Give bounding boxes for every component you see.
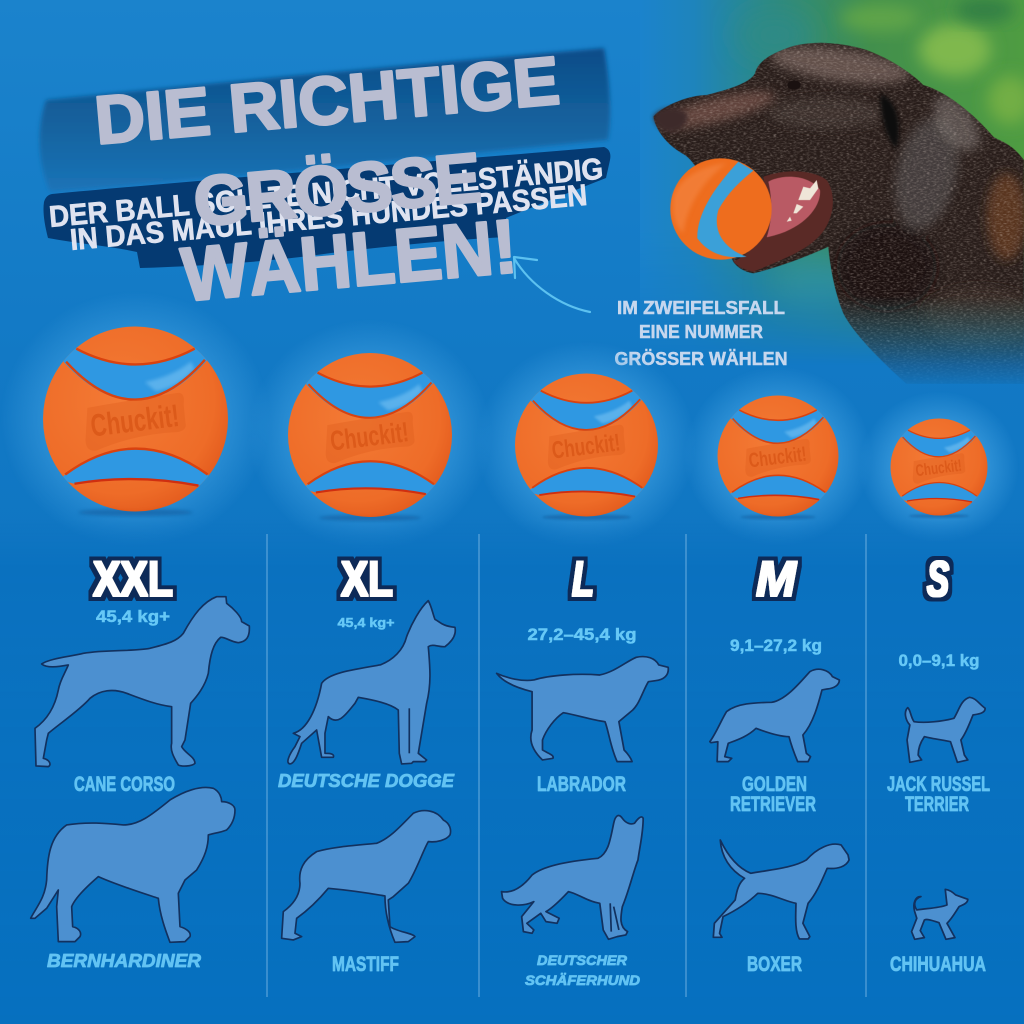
label golden retriever: RETRIEVER	[730, 793, 816, 816]
label deutscher schaeferhund: SCHÄFERHUND	[525, 972, 640, 988]
photo background: blurred meadow	[667, 0, 1024, 356]
main title: DIE RICHTIGE	[92, 43, 563, 159]
label jack russel terrier	[887, 773, 990, 816]
ball M	[718, 396, 838, 523]
weight S: 0,0–9,1 kg	[898, 652, 980, 670]
callout text: EINE NUMMER	[639, 322, 763, 342]
dog body and head	[653, 43, 1024, 384]
heading L: L	[572, 551, 594, 607]
title brush stroke, translucent dark	[40, 48, 610, 192]
label boxer: BOXER	[747, 953, 802, 976]
dog: bernhardiner	[31, 787, 235, 942]
subtitle text: IN DAS MAUL IHRES HUNDES PASSEN	[69, 179, 589, 257]
fur shading	[640, 33, 1024, 384]
dog: chihuahua	[912, 889, 968, 939]
label deutscher schaeferhund: DEUTSCHER	[537, 952, 628, 968]
subtitle brush stroke, navy	[44, 147, 610, 268]
dog: deutscher schaeferhund	[502, 815, 643, 939]
main title: WÄHLEN!	[178, 204, 520, 318]
open mouth	[733, 171, 833, 272]
dog: deutsche dogge	[288, 601, 455, 764]
ball XL	[288, 353, 452, 525]
ball M: Chuckit!	[747, 443, 808, 472]
column L	[497, 551, 668, 988]
balls row	[0, 291, 1019, 551]
dog: boxer	[713, 840, 849, 939]
column S	[887, 551, 990, 976]
ball L: Chuckit!	[550, 429, 622, 465]
dog: mastiff	[282, 811, 451, 942]
weight XXL: 45,4 kg+	[96, 608, 170, 626]
orange ball with blue band	[670, 158, 772, 260]
arrow pointing at title	[514, 257, 590, 312]
ball S	[890, 418, 988, 520]
label mastiff: MASTIFF	[332, 953, 399, 976]
label cane corso: CANE CORSO	[74, 773, 175, 796]
label golden retriever	[730, 773, 816, 816]
label deutscher schaeferhund	[525, 952, 640, 988]
weight M: 9,1–27,2 kg	[730, 637, 822, 655]
teeth	[787, 180, 818, 222]
ball XXL: Chuckit!	[89, 398, 181, 444]
photo: wet brown dog holding ball	[640, 33, 1024, 384]
ear shadow	[880, 93, 899, 150]
main title: GRÖSSE	[191, 138, 484, 241]
dog: jack russel terrier	[905, 697, 985, 762]
lower panel background	[0, 520, 1024, 1024]
main title	[92, 43, 563, 318]
ball XXL	[43, 326, 228, 521]
heading XXL: XXL	[93, 551, 173, 607]
heading XL: XL	[341, 551, 393, 607]
nose	[653, 108, 687, 132]
subtitle text: DER BALL SOLLTE NICHT VOLLSTÄNDIG	[48, 153, 604, 234]
ball S: Chuckit!	[914, 457, 963, 480]
ball XL: Chuckit!	[328, 416, 410, 457]
heading M: M	[756, 551, 797, 607]
weight L: 27,2–45,4 kg	[528, 625, 636, 644]
column XXL	[31, 551, 249, 971]
dog: golden retriever	[710, 669, 839, 762]
callout text	[614, 298, 788, 369]
label golden retriever: GOLDEN	[742, 773, 807, 796]
label deutsche dogge: DEUTSCHE DOGGE	[278, 771, 455, 791]
dog: cane corso	[35, 597, 249, 767]
column XL	[278, 551, 455, 976]
label jack russel terrier: TERRIER	[905, 793, 969, 816]
callout text: IM ZWEIFELSFALL	[617, 298, 785, 318]
callout text: GRÖSSER WÄHLEN	[614, 349, 788, 369]
label chihuahua: CHIHUAHUA	[890, 953, 986, 976]
heading S: S	[927, 551, 949, 607]
eye	[787, 80, 801, 90]
dog: labrador	[497, 657, 668, 762]
weight XL: 45,4 kg+	[338, 615, 395, 630]
column M	[710, 551, 849, 976]
label bernhardiner: BERNHARDINER	[47, 951, 201, 971]
ball L	[515, 374, 658, 524]
label labrador: LABRADOR	[537, 773, 626, 796]
